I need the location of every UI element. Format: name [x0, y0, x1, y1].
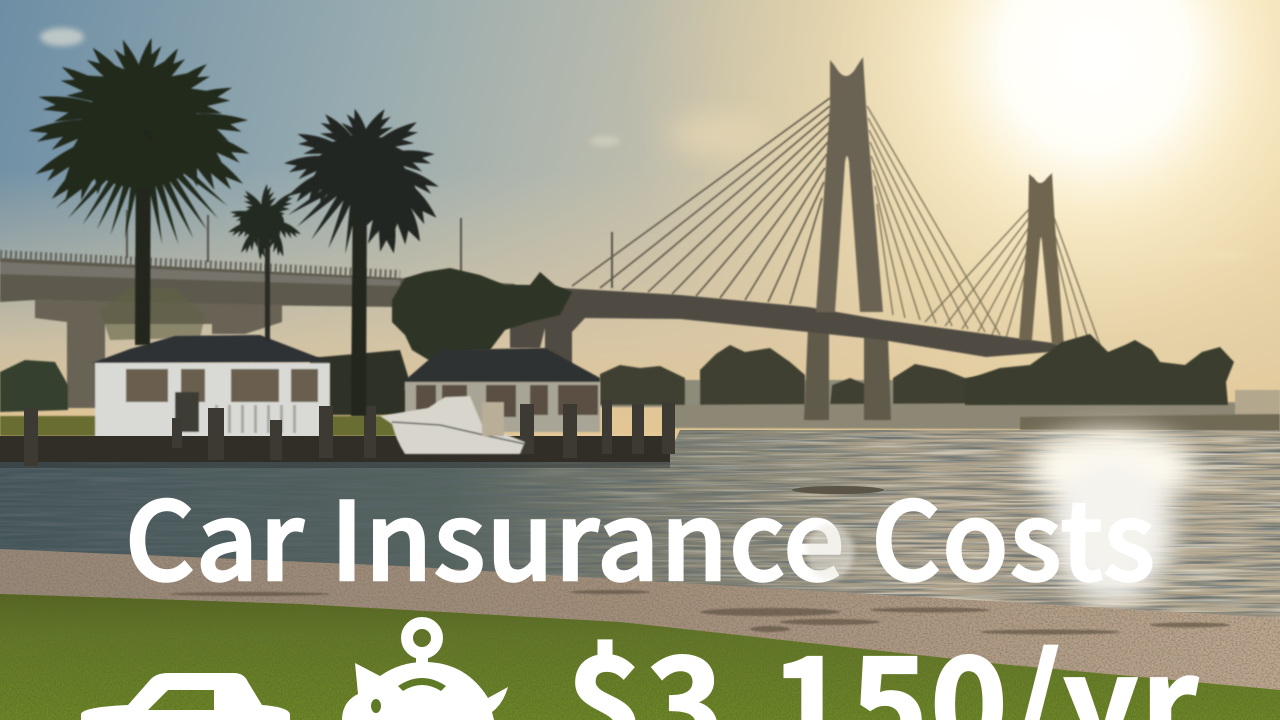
boathouse left	[92, 335, 330, 438]
dock and pilings	[0, 400, 675, 468]
walls	[95, 363, 330, 438]
roof	[92, 335, 330, 363]
tree by the right boathouse	[392, 268, 572, 362]
palm tree right	[282, 105, 445, 416]
boathouse right	[403, 348, 600, 432]
main tower	[816, 57, 883, 312]
palm tree left	[28, 37, 252, 345]
icon: car	[81, 673, 290, 720]
haze over the letter e	[806, 524, 854, 580]
grass lawn	[0, 594, 1280, 720]
left approach piers	[35, 300, 282, 408]
left cable fan	[572, 98, 830, 304]
sky background	[0, 0, 1280, 440]
icon: piggy bank	[342, 623, 508, 720]
title: Car Insurance Costs	[125, 456, 1155, 612]
left approach deck	[0, 258, 515, 310]
distant tree line and shore left of the sun	[600, 345, 1280, 431]
lamp posts	[127, 210, 612, 288]
second tower	[1019, 173, 1064, 346]
cable-stayed bridge	[0, 57, 1100, 420]
water	[0, 430, 1280, 625]
right cable fan	[867, 106, 1100, 345]
main deck and middle pier	[510, 285, 1066, 365]
main tower below deck	[804, 328, 891, 420]
left approach railing	[0, 254, 400, 274]
palm tree small	[227, 184, 303, 340]
sun reflection on water	[1028, 430, 1196, 602]
sandy beach	[0, 549, 1280, 720]
white motor boat	[380, 396, 525, 454]
trees right of the bridge	[965, 334, 1234, 405]
left shore bushes	[0, 288, 420, 436]
windows	[126, 369, 318, 402]
